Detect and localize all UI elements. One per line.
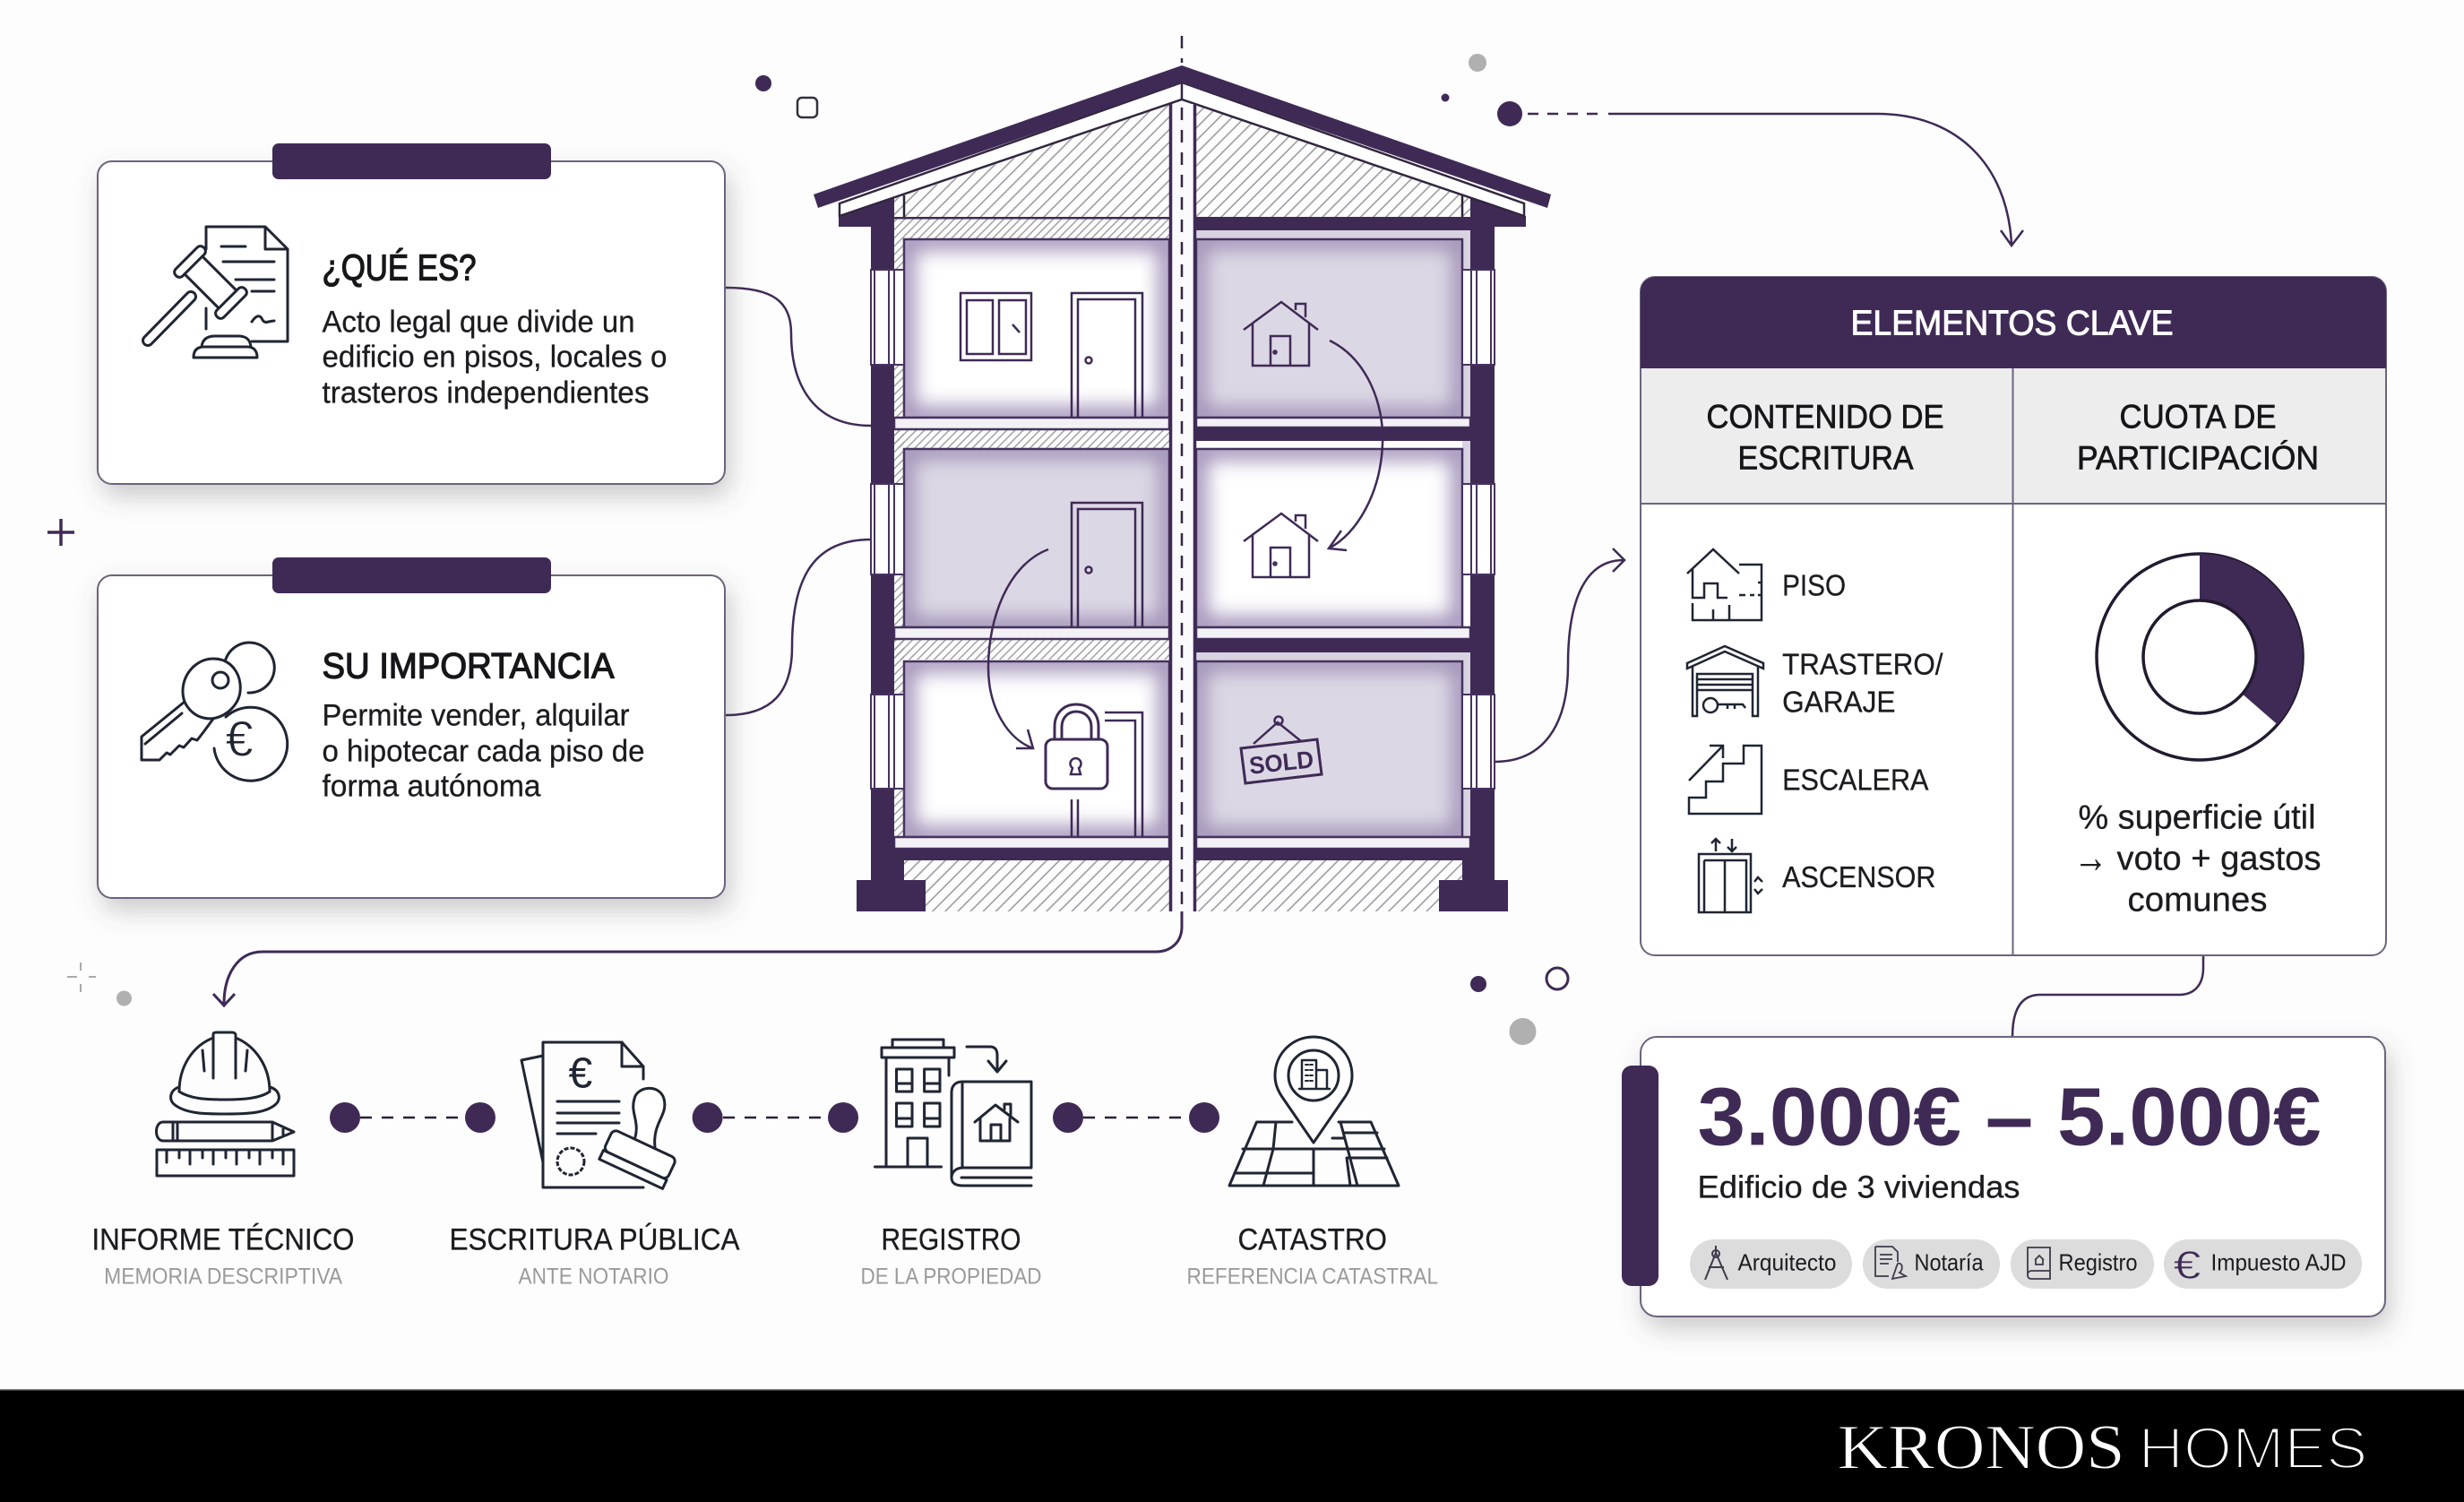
sub-header band (1641, 368, 2385, 504)
arrow: upper to middle right (1329, 341, 1383, 550)
pill: registro: Registro (2059, 1248, 2138, 1275)
room: middle right (1196, 449, 1462, 627)
icon: keys and euro coin: € (226, 710, 254, 766)
logo: kronos homes (1837, 1412, 2367, 1482)
step 4: catastro (1186, 1037, 1438, 1289)
step 2 subtitle: ANTE NOTARIO (518, 1264, 668, 1289)
decorative square (797, 98, 817, 117)
step connector 2 (693, 1102, 858, 1133)
connector: ¿qué es? to building (726, 288, 871, 426)
cost figure: 3.000€ – 5.000€ (1697, 1071, 2321, 1162)
step 3 title: REGISTRO (882, 1222, 1021, 1256)
cost caption: Edificio de 3 viviendas (1697, 1170, 2020, 1204)
column title: cuota: CUOTA DE (2120, 398, 2276, 435)
icon: padlock (1046, 704, 1107, 789)
room: upper right (1196, 239, 1462, 418)
item: piso (1687, 549, 1846, 620)
body text: forma autónoma (323, 769, 541, 803)
donut caption: % superficie útil (2079, 798, 2315, 836)
decorative dot: lower centre (1470, 976, 1486, 992)
step 2 title: ESCRITURA PÚBLICA (450, 1222, 740, 1256)
body text: trasteros independientes (323, 376, 649, 410)
wall windows (871, 270, 1495, 789)
step connector 1 (330, 1102, 495, 1133)
step connector 3 (1053, 1102, 1219, 1133)
body text: o hipotecar cada piso de (323, 734, 645, 768)
body text (323, 698, 645, 803)
step 3 subtitle: DE LA PROPIEDAD (860, 1264, 1041, 1289)
item: ascensor: ASCENSOR (1782, 861, 1935, 894)
icon: helmet, pencil and ruler (156, 1032, 294, 1176)
icon: house upper (1244, 302, 1318, 366)
item: escalera: ESCALERA (1782, 764, 1929, 797)
decorative ring (1546, 968, 1568, 989)
pill: notaría: Notaría (1914, 1248, 1984, 1275)
body text (323, 305, 667, 410)
icon: deed and stamp: € (568, 1049, 593, 1097)
donut caption (2073, 798, 2321, 919)
tab (272, 143, 551, 179)
pill: impuesto ajd (2164, 1239, 2362, 1289)
icon: door middle (1072, 503, 1142, 627)
step 1 subtitle: MEMORIA DESCRIPTIVA (104, 1264, 342, 1289)
panel: su importancia (98, 557, 725, 898)
donut caption: → (2073, 832, 2107, 882)
lavender side band right (1196, 230, 1470, 837)
step 1 title: INFORME TÉCNICO (91, 1222, 355, 1256)
column title: cuota (2077, 398, 2319, 476)
donut chart (2097, 554, 2303, 760)
heading: SU IMPORTANCIA (323, 646, 615, 686)
central column (1170, 104, 1195, 911)
step 4 subtitle: REFERENCIA CATASTRAL (1186, 1264, 1438, 1289)
room: upper left (904, 239, 1169, 418)
icon: building and property book (874, 1040, 1031, 1186)
panel: cost (1622, 1037, 2385, 1316)
attic hatch (894, 105, 1470, 217)
centre line (1181, 82, 1183, 99)
decorative sparkle (67, 962, 96, 992)
fascia (840, 82, 1524, 216)
icon: sold sign: SOLD (1248, 746, 1314, 780)
icon: gavel and document (148, 227, 288, 358)
body text: edificio en pisos, locales o (323, 340, 667, 374)
arrow: middle left to padlock (988, 549, 1048, 748)
panel: elementos clave (1641, 277, 2386, 955)
column title: contenido: CONTENIDO DE (1706, 398, 1944, 435)
step 2: escritura pública (450, 1042, 740, 1289)
icon: house middle (1244, 514, 1318, 577)
step 1: informe técnico (91, 1032, 355, 1289)
decorative dot: grey left (116, 991, 132, 1006)
table header (1641, 277, 2386, 368)
heading: ¿QUÉ ES? (323, 246, 477, 288)
room: lower right (1196, 661, 1462, 837)
panel: ¿qué es? (98, 143, 725, 484)
room: middle left (904, 449, 1169, 627)
icon: keys and euro coin (142, 643, 288, 781)
footer band (0, 1389, 2464, 1502)
body text: Acto legal que divide un (323, 305, 634, 339)
floor slabs (894, 418, 1470, 849)
pill: arquitecto: Arquitecto (1738, 1248, 1837, 1275)
pill: impuesto ajd: Impuesto AJD (2211, 1248, 2346, 1275)
connector: table to cost card (2012, 955, 2203, 1037)
step 4 title: CATASTRO (1238, 1222, 1387, 1256)
roof (814, 65, 1551, 208)
decorative dot: grey (1469, 54, 1486, 72)
icon: deed and stamp (521, 1042, 676, 1188)
item: trastero/garaje (1687, 646, 1943, 719)
tab (272, 557, 551, 593)
icon: window (961, 293, 1031, 360)
donut caption: comunes (2127, 881, 2267, 919)
step 3: registro (860, 1040, 1041, 1289)
decorative dot: grey large (1509, 1018, 1536, 1045)
item: trastero/garaje: TRASTERO/ (1782, 648, 1943, 681)
column title: contenido: ESCRITURA (1738, 439, 1914, 476)
building cross-section (814, 36, 1551, 911)
item: trastero/garaje: GARAJE (1782, 686, 1896, 719)
pill: arquitecto (1690, 1239, 1852, 1289)
icon: door lower (1072, 712, 1142, 837)
decorative dot: small (1441, 93, 1450, 102)
column title: contenido (1706, 398, 1944, 476)
arrow: roof dot to key elements (1497, 101, 2023, 246)
room: lower left (904, 661, 1169, 837)
body text: Permite vender, alquilar (323, 698, 629, 732)
icon: sold sign (1241, 717, 1322, 783)
arrow: building to key elements (1495, 548, 1624, 762)
pill: registro (2011, 1239, 2154, 1289)
dark structure (839, 197, 1526, 911)
logo: kronos homes: KRONOS (1837, 1412, 2125, 1482)
connector: su importancia to building (726, 540, 871, 715)
pill: impuesto ajd: € (2174, 1243, 2201, 1287)
column title: cuota: PARTICIPACIÓN (2077, 439, 2319, 476)
decorative dot: top centre (755, 75, 771, 91)
donut caption: voto + gastos (2116, 840, 2321, 877)
left slab hatches (894, 219, 1169, 660)
foundation hatch (904, 860, 1462, 911)
header title: ELEMENTOS CLAVE (1851, 304, 2174, 342)
icon: door upper (1072, 293, 1142, 418)
pill: notaría (1863, 1239, 2000, 1289)
item: escalera (1689, 746, 1929, 814)
item: piso: PISO (1782, 569, 1846, 602)
arrow: building to process steps (213, 911, 1182, 1006)
item: ascensor (1699, 839, 1935, 912)
icon: map pin and parcels (1229, 1037, 1399, 1186)
left accent bar (1622, 1066, 1658, 1286)
decorative plus (47, 519, 74, 546)
logo: kronos homes: HOMES (2138, 1414, 2367, 1480)
